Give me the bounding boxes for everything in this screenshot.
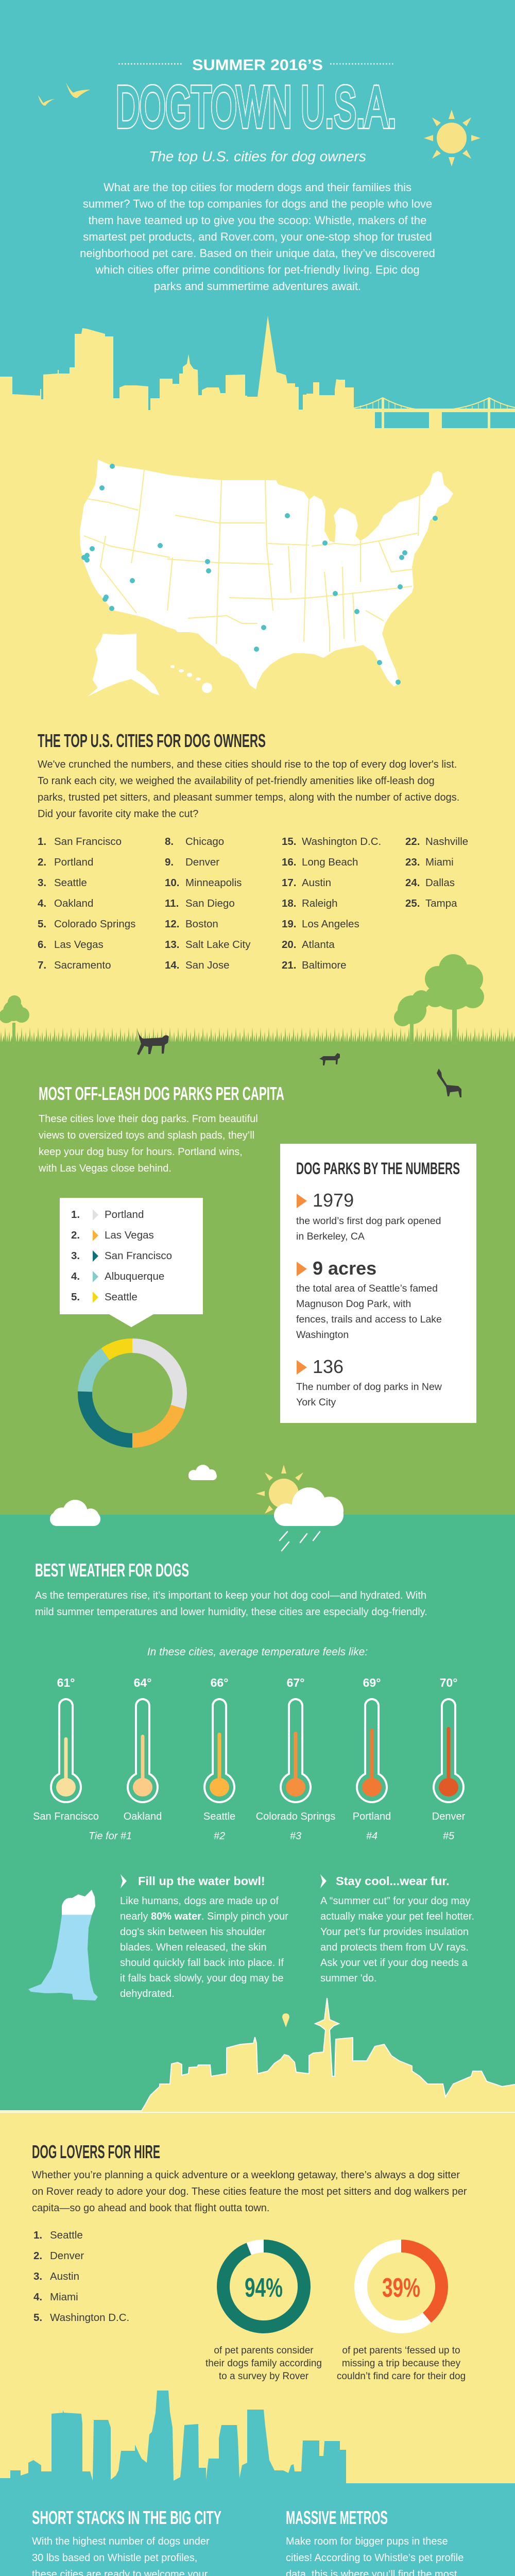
list: top 25 cities: Austin bbox=[302, 877, 331, 889]
donut captions: to a survey by Rover bbox=[219, 2371, 308, 2382]
tip: stay cool bbox=[320, 1874, 474, 1984]
list: top 25 cities: San Jose bbox=[185, 959, 229, 971]
tip: stay cool: A “summer cut” for your dog may bbox=[320, 1895, 470, 1907]
heading: summer 2016's: SUMMER 2016’S bbox=[192, 57, 323, 74]
top cities text: To rank each city, we weighed the availability of pet-friendly amenities like off-leash dog bbox=[38, 775, 435, 787]
thermometer city labels: Tie for #1 bbox=[89, 1831, 132, 1842]
icon: clouds and sun bbox=[50, 1465, 344, 1551]
top cities text: We've crunched the numbers, and these cities should rise to the top of every dog lover's list. bbox=[38, 759, 457, 770]
weather text: As the temperatures rise, it’s important to keep your hot dog cool—and hydrated. With bbox=[35, 1590, 426, 1601]
list: top 25 cities: 11. bbox=[165, 897, 179, 909]
list: dog sitters: 2. bbox=[33, 2250, 42, 2262]
list: top 25 cities: Portland bbox=[54, 856, 93, 868]
icon: sitting dog water level bbox=[28, 1890, 98, 2001]
thermometer city labels: #3 bbox=[290, 1831, 301, 1842]
list: top 25 cities: 19. bbox=[282, 918, 297, 930]
list: top 25 cities: 23. bbox=[405, 856, 420, 868]
list: top 25 cities: Seattle bbox=[54, 877, 87, 889]
panel: dog parks by the numbers bbox=[280, 1144, 476, 1423]
list: top 25 cities: 16. bbox=[282, 856, 297, 868]
list: top 25 cities: San Diego bbox=[185, 897, 235, 909]
donut captions: of pet parents consider bbox=[214, 2345, 314, 2356]
tip: water bowl: Like humans, dogs are made up of bbox=[120, 1895, 279, 1907]
stat: 1979 bbox=[296, 1190, 441, 1242]
tip: water bowl: dehydrated. bbox=[120, 1988, 175, 1999]
heading: best weather: BEST WEATHER FOR DOGS bbox=[35, 1560, 189, 1581]
list: top 25 cities: Atlanta bbox=[302, 939, 335, 951]
list: top 25 cities: Minneapolis bbox=[185, 877, 242, 889]
stat: 1979: 1979 bbox=[313, 1190, 354, 1211]
legend: top dog park cities: Portland bbox=[105, 1209, 144, 1221]
intro text bbox=[80, 181, 435, 293]
heading: dog lovers for hire: DOG LOVERS FOR HIRE bbox=[32, 2141, 160, 2162]
dog lovers text: on Rover ready to adore your dog. These cities feature the most pet sitters and dog walkers per bbox=[32, 2186, 467, 2197]
stat: 136: 136 bbox=[313, 1356, 344, 1377]
dog lovers text: capita—so go ahead and book that flight outta town. bbox=[32, 2202, 269, 2214]
massive metros text bbox=[286, 2536, 464, 2576]
temperature labels: 61° bbox=[57, 1676, 75, 1689]
list: top 25 cities: Raleigh bbox=[302, 897, 338, 909]
list: top 25 cities: San Francisco bbox=[54, 836, 122, 848]
list: top 25 cities: Los Angeles bbox=[302, 918, 359, 930]
list: dog sitters: 4. bbox=[33, 2291, 42, 2303]
list: top 25 cities: 8. bbox=[165, 836, 174, 848]
donut captions bbox=[205, 2345, 322, 2382]
icon: tip chevrons bbox=[121, 1874, 327, 1888]
off-leash text: views to oversized toys and splash pads, they’ll bbox=[39, 1130, 254, 1141]
tip: water bowl: should quickly fall back into place. If bbox=[120, 1957, 284, 1969]
icon: birds bbox=[38, 82, 90, 106]
list: dog sitters: Miami bbox=[50, 2291, 78, 2303]
stat: 9 acres: the total area of Seattle’s famed bbox=[296, 1283, 438, 1294]
tip: stay cool: actually make your pet feel hotter. bbox=[320, 1911, 474, 1922]
list: top 25 cities: 20. bbox=[282, 939, 297, 951]
donut: 94% bbox=[224, 2246, 304, 2327]
legend: top dog park cities: Seattle bbox=[105, 1291, 138, 1303]
legend: top dog park cities: 3. bbox=[71, 1250, 80, 1262]
list: top 25 cities: Dallas bbox=[425, 877, 455, 889]
legend: top dog park cities: 4. bbox=[71, 1270, 80, 1282]
list: top 25 cities: Nashville bbox=[425, 836, 468, 848]
list: top 25 cities: Las Vegas bbox=[54, 939, 104, 951]
stat: 136: York City bbox=[296, 1397, 336, 1408]
intro text: smartest pet products, and Rover.com, your one-stop shop for trusted bbox=[83, 230, 432, 243]
stat: 9 acres: fences, trails and access to Lake bbox=[296, 1314, 442, 1325]
legend: top dog park cities: San Francisco bbox=[105, 1250, 172, 1262]
list: top 25 cities: 5. bbox=[38, 918, 46, 930]
temperature labels: 69° bbox=[363, 1676, 381, 1689]
intro text: summer? Two of the top companies for dogs and the people who love bbox=[83, 197, 432, 210]
legend: top dog park cities: 2. bbox=[71, 1229, 80, 1241]
legend box with pointer bbox=[60, 1198, 203, 1327]
intro text: neighborhood pet care. Based on their unique data, they’ve discovered bbox=[80, 247, 435, 260]
dog lovers text: Whether you’re planning a quick adventure or a weeklong getaway, there’s always a dog sitter bbox=[32, 2170, 460, 2181]
thermometer city labels: Seattle bbox=[203, 1811, 235, 1822]
list: top 25 cities: 14. bbox=[165, 959, 179, 971]
donut caption 2: of pet parents ‘fessed up to bbox=[342, 2345, 460, 2356]
skyline: San Francisco bbox=[0, 316, 515, 429]
temperature labels: 70° bbox=[440, 1676, 457, 1689]
list: top 25 cities: Long Beach bbox=[302, 856, 358, 868]
intro text: which cities offer prime conditions for pet-friendly living. Epic dog bbox=[95, 263, 420, 276]
list: dog sitters: 3. bbox=[33, 2270, 42, 2282]
donut caption 2: couldn’t find care for their dog bbox=[337, 2371, 466, 2382]
stat: 136: The number of dog parks in New bbox=[296, 1381, 442, 1393]
list: top 25 cities: 7. bbox=[38, 959, 46, 971]
short stacks text bbox=[32, 2536, 210, 2576]
list: top 25 cities: 10. bbox=[165, 877, 179, 889]
thermometer city labels: #5 bbox=[443, 1831, 454, 1842]
off-leash text: keep your dog busy for hours. Portland wins, bbox=[39, 1146, 243, 1158]
donut: 94%: 94% bbox=[245, 2273, 283, 2303]
list: top 25 cities: Denver bbox=[185, 856, 219, 868]
donut caption 2 bbox=[337, 2345, 466, 2382]
list: dog sitters bbox=[33, 2229, 129, 2324]
weather text: mild summer temperatures and lower humidity, these cities are especially dog-friendly. bbox=[35, 1606, 427, 1618]
intro text: them have teamed up to give you the scoop: Whistle, makers of the bbox=[89, 214, 426, 227]
icon: sun bbox=[424, 110, 480, 166]
stat: 136 bbox=[296, 1356, 442, 1408]
donut: 39% bbox=[360, 2246, 442, 2327]
dotted lines by title bbox=[118, 63, 395, 64]
weather text bbox=[35, 1590, 427, 1618]
list: top 25 cities: Oakland bbox=[54, 897, 93, 909]
headings: short stacks and massive metros: SHORT STACKS IN THE BIG CITY bbox=[32, 2507, 221, 2528]
list: dog sitters: 1. bbox=[33, 2229, 42, 2241]
list: top 25 cities: 24. bbox=[405, 877, 420, 889]
icon: dogs in park bbox=[137, 1028, 461, 1097]
stat: 9 acres: Magnuson Dog Park, with bbox=[296, 1298, 411, 1310]
list: top 25 cities: 22. bbox=[405, 836, 420, 848]
donut caption 2: missing a trip because they bbox=[342, 2358, 460, 2369]
tip: stay cool: Ask your vet if your dog needs a bbox=[320, 1957, 468, 1969]
list: top 25 cities: 3. bbox=[38, 877, 46, 889]
park scene: trees and grass bbox=[0, 954, 515, 1043]
legend: top dog park cities: 5. bbox=[71, 1291, 80, 1303]
list: top 25 cities bbox=[38, 836, 468, 971]
stat: 1979: the world’s first dog park opened bbox=[296, 1215, 441, 1227]
list: dog sitters: Denver bbox=[50, 2250, 84, 2262]
list: top 25 cities: Boston bbox=[185, 918, 218, 930]
tip: stay cool: Your pet’s fur provides insulation bbox=[320, 1926, 469, 1938]
legend: top dog park cities: Albuquerque bbox=[105, 1270, 164, 1282]
off-leash text: with Las Vegas close behind. bbox=[39, 1163, 171, 1174]
heading: off-leash dog parks: MOST OFF-LEASH DOG PARKS PER CAPITA bbox=[39, 1083, 284, 1104]
tip: water bowl: blades. When released, the skin bbox=[120, 1942, 267, 1953]
list: top 25 cities: Chicago bbox=[185, 836, 224, 848]
donut chart: dog parks bbox=[85, 1346, 180, 1440]
off-leash text bbox=[39, 1113, 258, 1174]
tip: water bowl bbox=[120, 1874, 288, 1999]
list: top 25 cities: 21. bbox=[282, 959, 297, 971]
list: top 25 cities: 15. bbox=[282, 836, 297, 848]
thermometer city labels: Oakland bbox=[124, 1811, 162, 1822]
list: top 25 cities: Sacramento bbox=[54, 959, 111, 971]
legend: top dog park cities bbox=[71, 1209, 172, 1303]
temperature labels: 66° bbox=[211, 1676, 228, 1689]
massive metros text: cities! According to Whistle’s pet profile bbox=[286, 2552, 464, 2564]
list: dog sitters: 5. bbox=[33, 2312, 42, 2324]
massive metros text: Make room for bigger pups in these bbox=[286, 2536, 448, 2547]
list: top 25 cities: 25. bbox=[405, 897, 420, 909]
stat: 9 acres: 9 acres bbox=[313, 1258, 376, 1279]
list: top 25 cities: 13. bbox=[165, 939, 179, 951]
list: top 25 cities: 6. bbox=[38, 939, 46, 951]
tip: stay cool: and protects them from UV rays. bbox=[320, 1942, 469, 1953]
temperature labels: 67° bbox=[287, 1676, 304, 1689]
map: United States bbox=[80, 460, 453, 697]
thermometer city labels: Colorado Springs bbox=[256, 1811, 335, 1822]
tip: water bowl: it falls back slowly, your dog may be bbox=[120, 1973, 284, 1984]
weather subtitle: In these cities, average temperature feels like: bbox=[147, 1646, 368, 1658]
thermometers chart bbox=[50, 1698, 465, 1803]
donut captions: their dogs family according bbox=[205, 2358, 322, 2369]
list: dog sitters: Washington D.C. bbox=[50, 2312, 129, 2324]
legend chevrons bbox=[93, 1209, 98, 1303]
subtitle: The top U.S. cities for dog owners bbox=[149, 148, 366, 164]
list: top 25 cities: 17. bbox=[282, 877, 297, 889]
list: top 25 cities: Colorado Springs bbox=[54, 918, 135, 930]
top cities text bbox=[38, 759, 459, 820]
donut: 39%: 39% bbox=[382, 2273, 420, 2303]
legend: top dog park cities: Las Vegas bbox=[105, 1229, 154, 1241]
legend: top dog park cities: 1. bbox=[71, 1209, 80, 1221]
thermometer city labels: #4 bbox=[366, 1831, 377, 1842]
dog lovers text bbox=[32, 2170, 467, 2214]
list: top 25 cities: 18. bbox=[282, 897, 297, 909]
list: top 25 cities: Washington D.C. bbox=[302, 836, 381, 848]
list: top 25 cities: Tampa bbox=[425, 897, 457, 909]
stat: 9 acres bbox=[296, 1258, 442, 1341]
tip: stay cool: Stay cool...wear fur. bbox=[336, 1874, 450, 1888]
list: top 25 cities: 4. bbox=[38, 897, 46, 909]
list: top 25 cities: 9. bbox=[165, 856, 174, 868]
skyline: Seattle bbox=[0, 1998, 515, 2112]
list: top 25 cities: 2. bbox=[38, 856, 46, 868]
temperature labels bbox=[57, 1676, 457, 1689]
list: dog sitters: Seattle bbox=[50, 2229, 83, 2241]
tip: stay cool: summer 'do. bbox=[320, 1973, 376, 1984]
heading: top cities: THE TOP U.S. CITIES FOR DOG OWNERS bbox=[38, 730, 266, 751]
stat: 9 acres: Washington bbox=[296, 1329, 349, 1341]
tip: water bowl: dog's skin between his shoulder bbox=[120, 1926, 266, 1938]
short stacks text: 30 lbs based on Whistle pet profiles, bbox=[32, 2552, 197, 2564]
headings: short stacks and massive metros: MASSIVE METROS bbox=[286, 2507, 388, 2528]
off-leash text: These cities love their dog parks. From beautiful bbox=[39, 1113, 258, 1125]
thermometer city labels: Denver bbox=[432, 1811, 465, 1822]
short stacks text: With the highest number of dogs under bbox=[32, 2536, 210, 2547]
tip: water bowl: nearly 80% water. Simply pinch your bbox=[120, 1911, 288, 1922]
top cities text: parks, trusted pet sitters, and pleasant summer temps, along with the number of active dogs. bbox=[38, 792, 459, 803]
list: top 25 cities: 1. bbox=[38, 836, 46, 848]
list: top 25 cities: 12. bbox=[165, 918, 179, 930]
temperature labels: 64° bbox=[134, 1676, 151, 1689]
tip: water bowl: Fill up the water bowl! bbox=[138, 1874, 265, 1888]
skyline: Los Angeles bbox=[0, 2391, 515, 2488]
stat: 1979: in Berkeley, CA bbox=[296, 1231, 365, 1242]
top cities text: Did your favorite city make the cut? bbox=[38, 808, 198, 820]
thermometer city labels: #2 bbox=[214, 1831, 225, 1842]
thermometer city labels: San Francisco bbox=[33, 1811, 99, 1822]
intro text: What are the top cities for modern dogs and their families this bbox=[104, 181, 411, 194]
thermometer city labels bbox=[33, 1811, 465, 1842]
list: top 25 cities: Miami bbox=[425, 856, 454, 868]
intro text: parks and summertime adventures await. bbox=[154, 280, 361, 293]
list: top 25 cities: Baltimore bbox=[302, 959, 347, 971]
thermometer city labels: Portland bbox=[353, 1811, 391, 1822]
list: top 25 cities: Salt Lake City bbox=[185, 939, 250, 951]
list: dog sitters: Austin bbox=[50, 2270, 79, 2282]
